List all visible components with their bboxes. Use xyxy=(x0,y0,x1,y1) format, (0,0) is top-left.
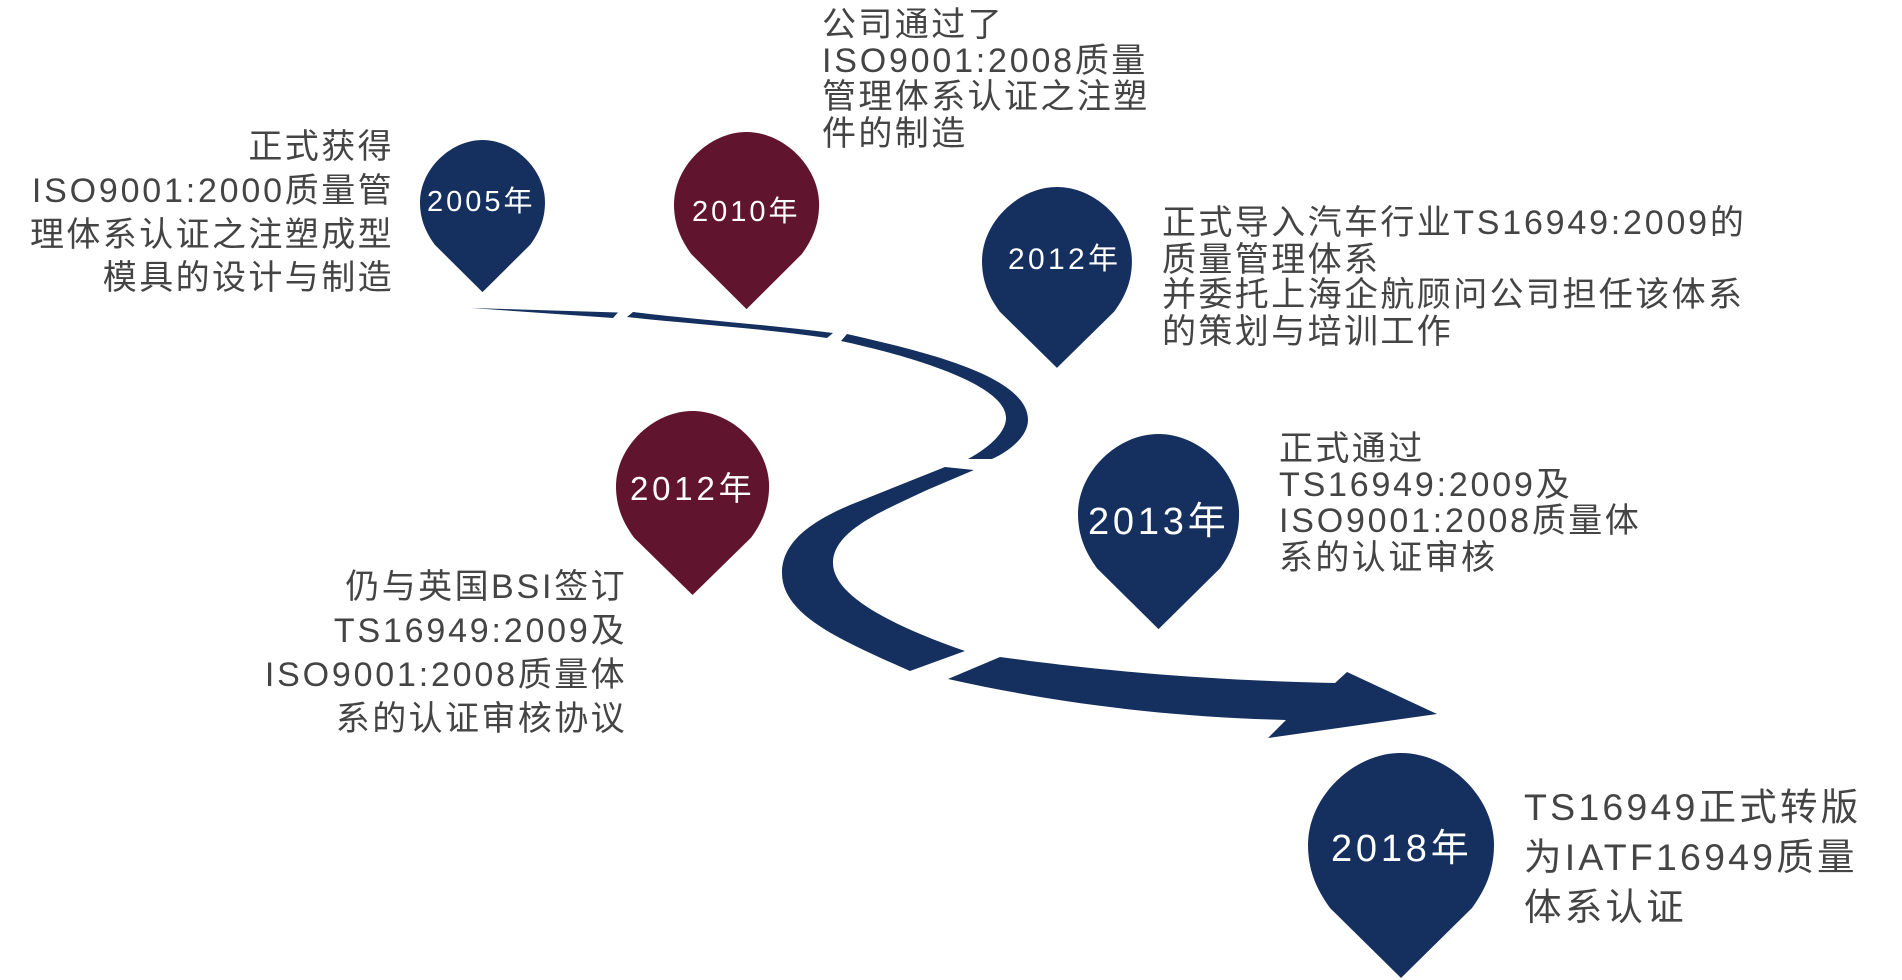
2018 description: 为IATF16949质量 xyxy=(1524,836,1858,878)
2018 description: TS16949正式转版 xyxy=(1524,786,1861,828)
2012 blue description: 的策划与培训工作 xyxy=(1162,313,1453,351)
2005 description: 正式获得 xyxy=(248,128,394,166)
2012 maroon description: ISO9001:2008质量体 xyxy=(265,656,627,694)
2012 blue pin xyxy=(982,187,1132,368)
curved timeline arrow xyxy=(471,308,1437,738)
2012 maroon pin: 2012年 xyxy=(630,470,755,507)
2010 description: 公司通过了 xyxy=(822,6,1004,44)
2013 description: TS16949:2009及 xyxy=(1279,466,1572,504)
2012 blue pin: 2012年 xyxy=(1008,243,1121,276)
2012 maroon description: TS16949:2009及 xyxy=(334,612,627,650)
2005 description: 模具的设计与制造 xyxy=(103,259,394,297)
2012 blue description: 质量管理体系 xyxy=(1162,241,1380,279)
2018 pin: 2018年 xyxy=(1331,828,1473,870)
2012 maroon pin xyxy=(616,411,769,595)
2010 description: 件的制造 xyxy=(822,115,968,153)
2013 pin: 2013年 xyxy=(1088,501,1230,543)
2005 pin xyxy=(420,140,545,292)
2018 description: 体系认证 xyxy=(1524,886,1687,928)
2005 description: 理体系认证之注塑成型 xyxy=(30,216,394,254)
2005 pin: 2005年 xyxy=(427,185,536,218)
2013 description: 系的认证审核 xyxy=(1279,539,1497,577)
2013 description: ISO9001:2008质量体 xyxy=(1279,502,1641,540)
2013 description: 正式通过 xyxy=(1279,430,1425,468)
2010 pin xyxy=(674,132,819,309)
2012 maroon description: 仍与英国BSI签订 xyxy=(345,568,627,606)
2010 pin: 2010年 xyxy=(692,195,801,228)
2018 pin xyxy=(1308,753,1494,978)
2010 description: 管理体系认证之注塑 xyxy=(822,78,1150,116)
2010 description: ISO9001:2008质量 xyxy=(822,42,1148,80)
2012 blue description: 并委托上海企航顾问公司担任该体系 xyxy=(1162,276,1744,314)
2012 blue description: 正式导入汽车行业TS16949:2009的 xyxy=(1162,204,1746,242)
2013 pin xyxy=(1078,434,1239,629)
2012 maroon description: 系的认证审核协议 xyxy=(336,700,627,738)
2005 description: ISO9001:2000质量管 xyxy=(32,172,394,210)
